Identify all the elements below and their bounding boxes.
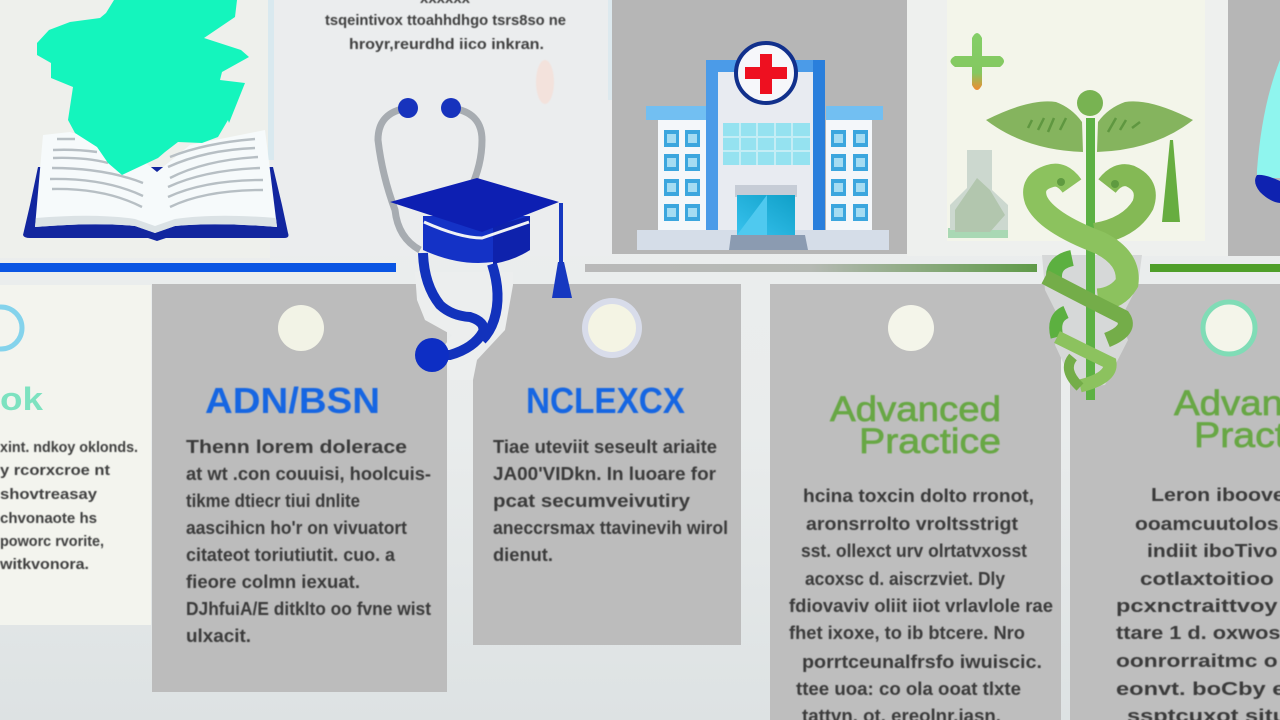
card heading: Advanced [830,390,1001,429]
card body text: witkvonora. [0,556,89,573]
icon: tassel shape [1162,140,1180,222]
card: Advanced Practice right [1070,284,1280,720]
intro text: tsqeintivox ttoahhdhgo tsrs8so ne [325,12,566,29]
card body text: y rcorxcroe nt [0,462,110,479]
card body text: JA00'VIDkn. In luoare for [493,464,716,484]
step marker [582,298,642,358]
card body text: chvonaote hs [0,510,97,527]
card body text: Tiae uteviit seseult ariaite [493,437,717,457]
timeline line: green [1150,264,1280,272]
card heading: NCLEXCX [526,380,685,421]
icon: flask [948,150,1008,238]
card body text: aronsrrolto vroltsstrigt [806,514,1018,534]
card: ADN/BSN [152,284,447,692]
card heading [1174,384,1280,455]
card: NCLEX [473,284,741,645]
snake coils [1095,175,1145,234]
card body text: pcat secumveivutiry [493,491,690,511]
card body text: hcina toxcin dolto rronot, [803,486,1034,506]
card body text: ulxacit. [186,626,251,646]
card body text: tikme dtiecr tiui dnlite [186,491,360,511]
panel: top right edge [1228,0,1280,256]
card body text: Thenn lorem dolerace [186,437,407,457]
card body text [1116,485,1280,720]
card heading [830,390,1001,461]
card heading: ADN/BSN [205,380,380,421]
card heading: ok [0,381,43,417]
icon: hospital building [637,43,889,250]
icon: plus sign [950,33,1004,90]
card: Advanced Practice [770,284,1061,720]
card body text [186,437,431,646]
card body text: acoxsc d. aiscrzviet. Dly [805,569,1005,589]
card body text: fdiovaviv oliit iiot vrlavlole rae [789,596,1053,616]
card body text: fieore colmn iexuat. [186,572,360,592]
step marker [888,305,934,351]
panel: hospital [612,0,907,254]
card body text: aneccrsmax ttavinevih wirol [493,518,728,538]
intro text: hroyr,reurdhd iico inkran. [349,36,544,53]
step marker [0,307,22,349]
card body text: porrtceunalfrsfo iwuiscic. [802,652,1042,672]
card heading: Practice [859,422,1001,461]
card body text: xint. ndkoy oklonds. [0,439,138,456]
card body text: sst. ollexct urv olrtatvxosst [801,541,1027,561]
card body text: at wt .con couuisi, hoolcuis- [186,464,431,484]
panel: top intro text [270,0,613,256]
icon: graduation cap and stethoscope [378,98,572,380]
timeline line: gray to green [585,264,1037,272]
map silhouette [37,0,249,175]
card body text [789,486,1053,720]
panel: caduceus backdrop [907,0,1228,256]
card body text [493,437,728,565]
wings [986,101,1083,152]
panel: top left book panel [0,0,288,258]
card body text: aascihicn ho'r on vivuatort [186,518,407,538]
card body text: dienut. [493,545,553,565]
card body text: fhet ixoxe, to ib btcere. Nro [789,623,1025,643]
timeline line: blue [0,263,396,272]
intro text [325,0,566,53]
card body text [0,439,138,573]
staff [1086,118,1095,400]
icon: caduceus [986,90,1193,400]
step marker [1203,302,1255,354]
icon: open book [23,130,288,241]
card: first step [0,285,151,625]
card body text: citateot toriutiutit. cuo. a [186,545,396,565]
card body text: shovtreasay [0,486,98,503]
faint pink mark [536,60,554,104]
card body text: DJhfuiA/E ditklto oo fvne wist [186,599,431,619]
card body text: ttee uoa: co ola ooat tlxte [796,679,1021,699]
step marker [278,305,324,351]
card body text: poworc rvorite, [0,533,104,550]
